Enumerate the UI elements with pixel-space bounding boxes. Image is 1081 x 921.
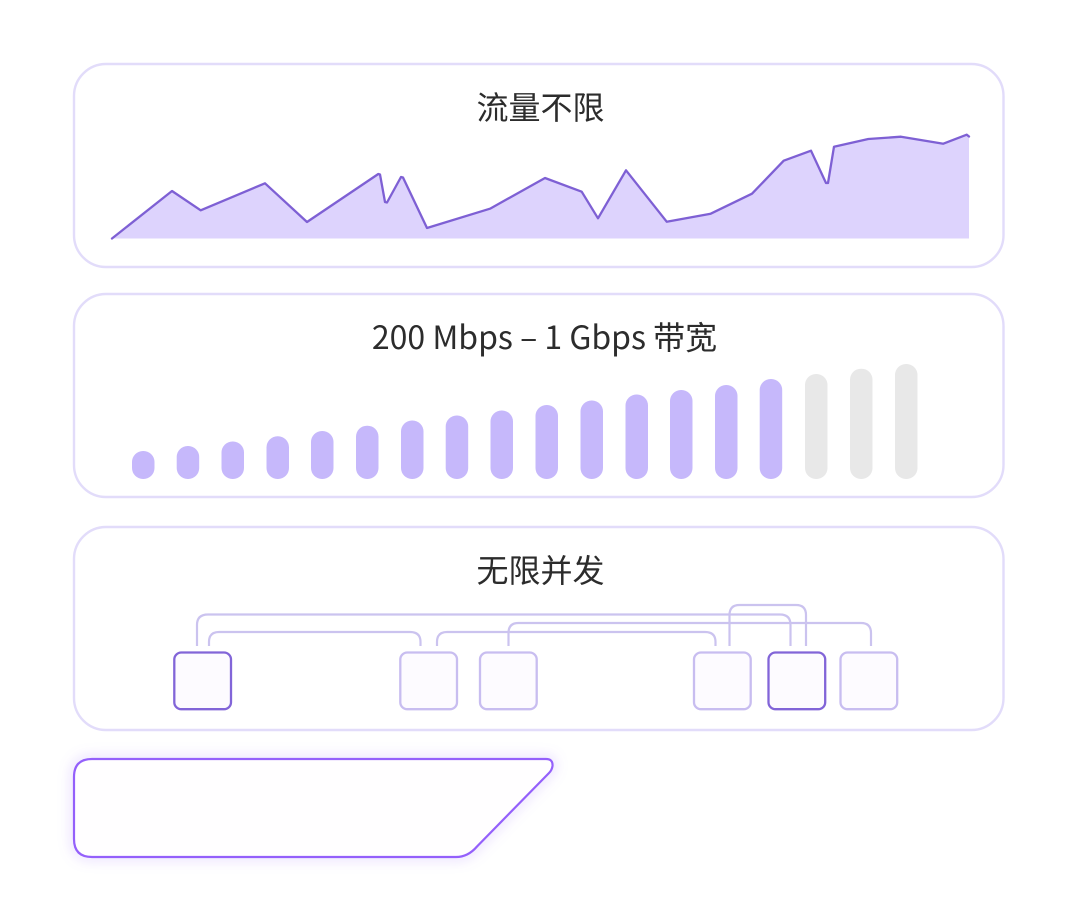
node	[400, 652, 457, 709]
node	[480, 652, 537, 709]
node	[840, 652, 897, 709]
panel: unlimited concurrency	[74, 527, 1004, 730]
heading: bandwidth: 200 Mbps – 1 Gbps 带宽	[372, 313, 717, 359]
connectors between nodes	[197, 605, 871, 646]
area chart: traffic	[112, 135, 969, 238]
panel: unlimited traffic	[74, 64, 1004, 267]
node: active right	[768, 652, 825, 709]
panel: bandwidth	[74, 294, 1004, 497]
bar chart: bandwidth levels	[132, 364, 918, 479]
highlighted empty callout shape	[74, 759, 553, 857]
heading: unlimited traffic: 流量不限	[476, 83, 605, 129]
node: active left	[174, 652, 231, 709]
heading: unlimited concurrency: 无限并发	[476, 546, 605, 592]
node	[694, 652, 751, 709]
